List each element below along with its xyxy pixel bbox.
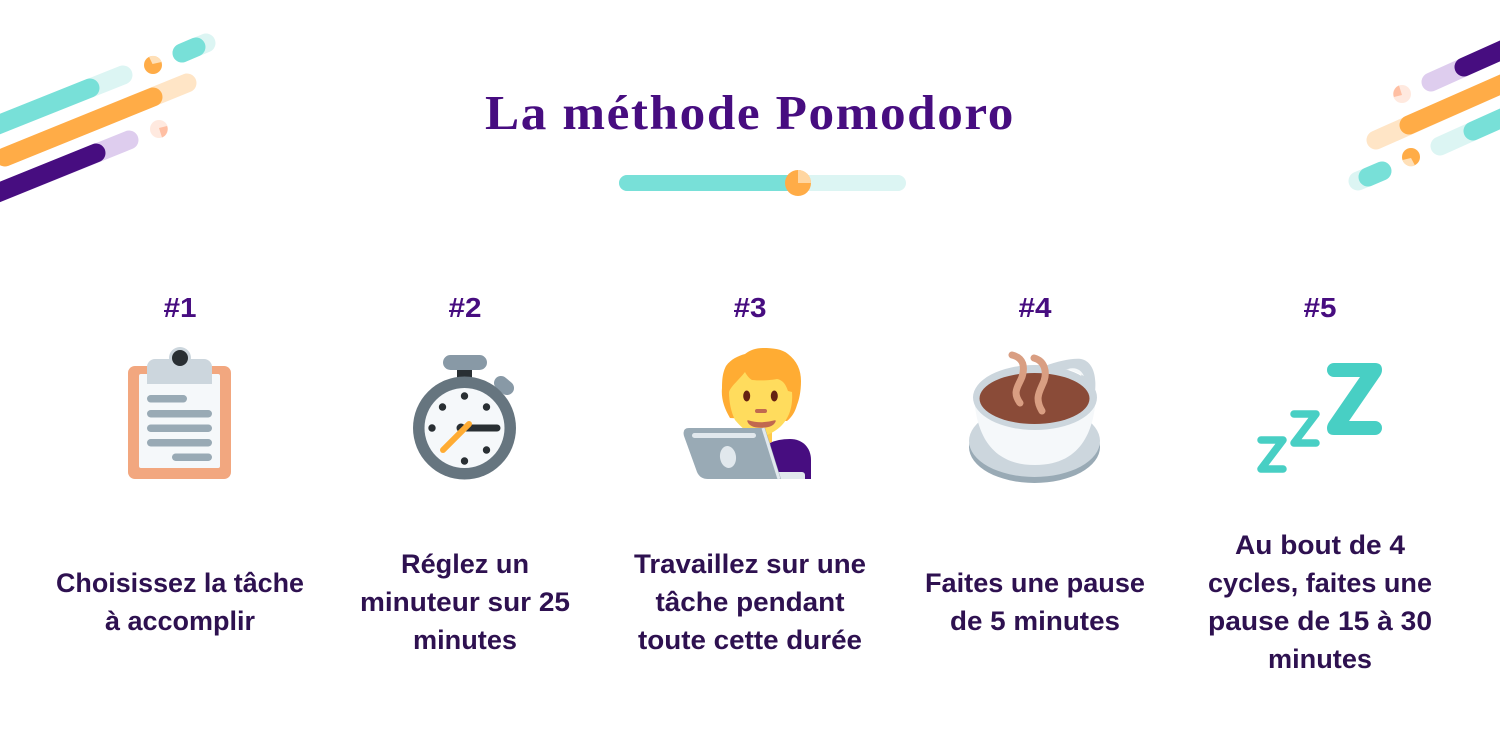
step 5 text: Au bout de 4 bbox=[1235, 530, 1405, 560]
step 5 text: pause de 15 à 30 bbox=[1208, 606, 1432, 636]
step 3 text: Travaillez sur une bbox=[634, 549, 866, 579]
step 2 bbox=[360, 292, 570, 655]
step 5 number: #5 bbox=[1304, 292, 1336, 323]
step 2 number: #2 bbox=[448, 292, 482, 323]
step 5 text: cycles, faites une bbox=[1208, 568, 1432, 598]
step 4 text: Faites une pause bbox=[925, 568, 1145, 598]
step 1 bbox=[56, 292, 304, 636]
step 5 text: minutes bbox=[1268, 644, 1372, 674]
step 3 text: toute cette durée bbox=[638, 625, 862, 655]
step 3 text bbox=[634, 549, 866, 655]
icon: zzz bbox=[1261, 363, 1382, 469]
step 3 number: #3 bbox=[734, 292, 766, 323]
step 1 number: #1 bbox=[164, 292, 196, 323]
step 2 text: Réglez un bbox=[401, 549, 529, 579]
step 4 text: de 5 minutes bbox=[950, 606, 1120, 636]
step 1 text: à accomplir bbox=[105, 606, 255, 636]
icon: clipboard bbox=[128, 347, 231, 479]
step 5 text bbox=[1208, 530, 1432, 674]
step 4 bbox=[925, 292, 1145, 636]
progress bar bbox=[619, 170, 906, 196]
step 3 text: tâche pendant bbox=[656, 587, 845, 617]
step 4 number: #4 bbox=[1018, 292, 1052, 323]
step 5 bbox=[1208, 292, 1432, 674]
decoration: right diagonal stripes bbox=[1358, 42, 1500, 181]
step 1 text: Choisissez la tâche bbox=[56, 568, 304, 598]
decoration: left diagonal stripes bbox=[0, 43, 206, 200]
icon: stopwatch bbox=[413, 355, 516, 480]
step 4 text bbox=[925, 568, 1145, 636]
icon: hot coffee bbox=[969, 355, 1100, 483]
title: La méthode Pomodoro bbox=[485, 85, 1015, 140]
icon: person at laptop bbox=[684, 348, 811, 479]
step 2 text: minutes bbox=[413, 625, 517, 655]
step 2 text: minuteur sur 25 bbox=[360, 587, 570, 617]
step 3 bbox=[634, 292, 866, 655]
step 1 text bbox=[56, 568, 304, 636]
step 2 text bbox=[360, 549, 570, 655]
